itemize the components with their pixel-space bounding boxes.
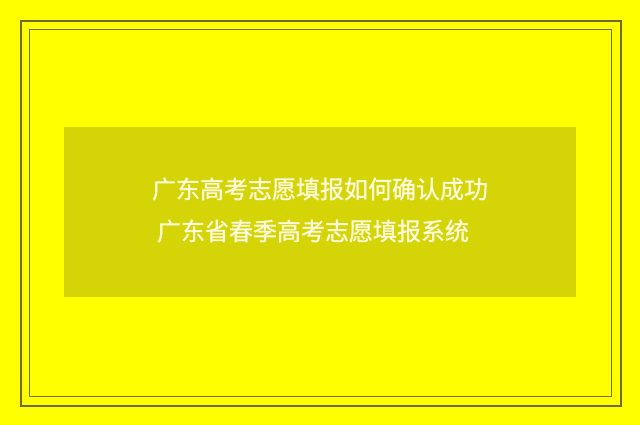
inner border frame bbox=[29, 29, 612, 397]
heading: line two: 广东省春季高考志愿填报系统 bbox=[157, 219, 469, 246]
heading: line one: 广东高考志愿填报如何确认成功 bbox=[152, 177, 488, 204]
panel: title banner bbox=[64, 127, 576, 297]
